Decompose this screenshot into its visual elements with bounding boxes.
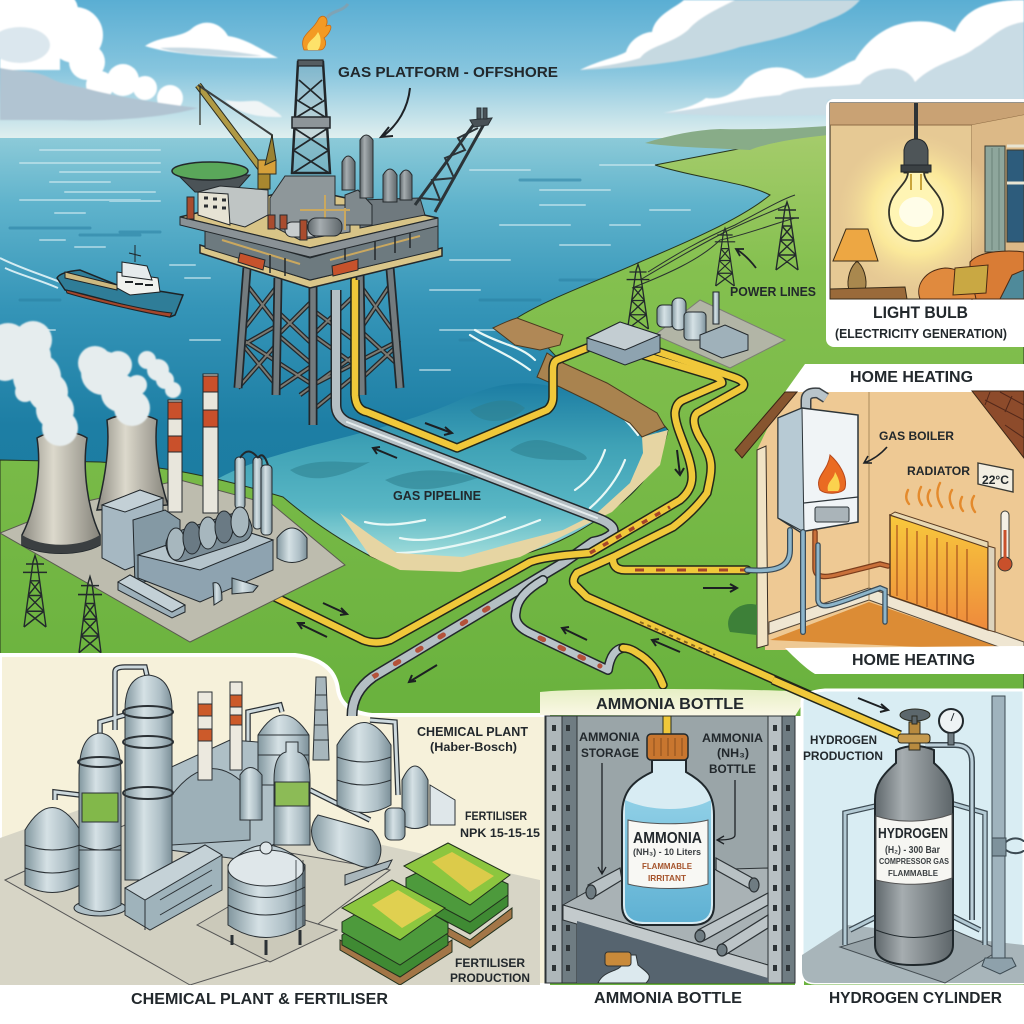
small cylinder behind bbox=[240, 768, 262, 820]
flare flame bbox=[303, 16, 331, 50]
bush bbox=[728, 604, 757, 635]
pipeline: yellow gas lines bbox=[240, 280, 900, 735]
panel: hydrogen cylinder: COMPRESSOR GAS bbox=[879, 857, 950, 866]
arrow: storage bbox=[598, 763, 606, 874]
front storage tank bbox=[232, 930, 300, 955]
pressure gauge bbox=[939, 709, 963, 745]
flare boom bbox=[415, 108, 492, 212]
cloud: small bbox=[145, 23, 278, 58]
bottom white strip bbox=[0, 985, 1024, 1024]
cloud: behind crane bbox=[225, 100, 282, 117]
sofa bbox=[919, 251, 1024, 299]
heat waves bbox=[906, 483, 975, 512]
label: radiator: RADIATOR bbox=[907, 464, 970, 478]
horizontal tank bbox=[312, 815, 381, 867]
onshore gas processing plant bbox=[587, 292, 785, 368]
cloud: left white puffs bbox=[0, 0, 183, 111]
pipe into bottle bbox=[663, 716, 671, 736]
helipad bbox=[178, 175, 250, 192]
thermostat: 22°C bbox=[982, 475, 1009, 487]
crane bbox=[198, 85, 276, 189]
bay: surf lines bbox=[365, 330, 638, 553]
small bottle below bbox=[598, 955, 649, 983]
panel: hydrogen cylinder: FLAMMABLE bbox=[888, 869, 939, 878]
thermostat bbox=[978, 463, 1013, 492]
label: ammonia nh3 bottle: AMMONIA bbox=[702, 731, 763, 745]
cylinder bbox=[875, 746, 953, 965]
arrow: bottle bbox=[717, 780, 735, 844]
yellow inlet over panel bbox=[773, 680, 900, 735]
pipeline: gas pipeline (grey) bbox=[336, 297, 613, 716]
stacks bbox=[198, 677, 329, 780]
coastal cliffs bbox=[493, 318, 563, 350]
wall bbox=[802, 690, 1024, 983]
beach sand along bay bbox=[340, 430, 668, 572]
label: gas platform: GAS PLATFORM - OFFSHORE bbox=[338, 64, 558, 81]
label: power lines: POWER LINES bbox=[730, 284, 816, 299]
glass bottle: AMMONIA bbox=[633, 830, 702, 847]
pipe into plant bbox=[352, 677, 373, 716]
panel: chemical plant and fertiliser bbox=[0, 655, 548, 985]
cooling tower front bbox=[22, 432, 100, 553]
roof right bbox=[972, 391, 1024, 458]
bay: seabed patches bbox=[290, 400, 587, 489]
column A bbox=[79, 733, 121, 912]
vessel small right bbox=[402, 766, 428, 828]
label: fertiliser production: FERTILISER bbox=[455, 956, 525, 970]
arrow: to power lines bbox=[736, 249, 756, 268]
heading: light bulb: LIGHT BULB bbox=[873, 303, 968, 322]
caption: hydrogen cylinder: HYDROGEN CYLINDER bbox=[829, 990, 1002, 1007]
shelf pipes bbox=[586, 858, 768, 956]
power station (left) bbox=[0, 321, 307, 618]
cloud: upper right bbox=[580, 0, 860, 70]
background: sky bbox=[0, 0, 1024, 140]
icon: flame bbox=[819, 455, 846, 493]
main reactor body bbox=[165, 740, 300, 860]
label: ammonia storage: AMMONIA bbox=[579, 730, 640, 744]
thermometer bbox=[998, 511, 1012, 571]
icon: pylons near power station bbox=[23, 556, 102, 653]
low process unit bbox=[125, 845, 222, 930]
banner bbox=[540, 689, 810, 716]
caption: chemical plant and fertiliser: CHEMICAL PLANT & FERTILISER bbox=[131, 991, 388, 1008]
icon: hanging bulb bbox=[889, 103, 943, 241]
panel: hydrogen cylinder bbox=[773, 680, 1024, 983]
arrow: inlet bbox=[858, 698, 888, 712]
heating pipes bbox=[747, 530, 888, 632]
caption: ammonia bottle: AMMONIA BOTTLE bbox=[594, 990, 742, 1007]
label: fertiliser npk: FERTILISER bbox=[465, 809, 527, 823]
valve bbox=[898, 709, 930, 750]
cliff band bbox=[537, 353, 665, 437]
floor bbox=[770, 602, 1024, 655]
panel: home heating bbox=[728, 364, 1024, 674]
cloud: right large bbox=[663, 0, 1024, 116]
risers in front of jacket bbox=[336, 280, 355, 405]
derrick bbox=[292, 60, 330, 173]
label: gas boiler: GAS BOILER bbox=[879, 429, 954, 443]
rack holes bbox=[554, 725, 788, 980]
cloud: left shadow layer bbox=[0, 68, 198, 120]
lower deck bbox=[200, 245, 442, 288]
power lines and pylons bbox=[627, 195, 816, 329]
rack uprights bbox=[546, 716, 795, 983]
house interior bbox=[757, 392, 1024, 650]
vessels bbox=[25, 675, 455, 955]
column B bbox=[125, 675, 172, 880]
gauge tube bbox=[925, 745, 972, 920]
power plant pad bbox=[0, 480, 345, 642]
caption: electricity generation: (ELECTRICITY GENERATION) bbox=[835, 326, 1007, 341]
grey-green vessel bbox=[274, 742, 310, 845]
clouds bbox=[0, 0, 1024, 120]
arrow: to boiler bbox=[864, 447, 887, 463]
plant pad bbox=[5, 825, 390, 985]
whitecaps on the sea bbox=[20, 150, 690, 370]
label: storage: STORAGE bbox=[581, 746, 639, 760]
gutter between ammonia and hydrogen panels bbox=[795, 716, 804, 986]
jacket bracing bbox=[238, 285, 400, 410]
label: gas pipeline: GAS PIPELINE bbox=[393, 489, 481, 503]
table lamp bbox=[833, 229, 878, 292]
panel: ammonia bottle bbox=[540, 689, 810, 983]
accommodation block bbox=[198, 186, 268, 227]
glass bottle: FLAMMABLE bbox=[642, 861, 692, 871]
radiator bbox=[890, 512, 995, 632]
steam plumes bbox=[0, 321, 181, 446]
tank left bbox=[25, 808, 80, 892]
label: chemical plant: CHEMICAL PLANT bbox=[417, 725, 528, 739]
ground bbox=[0, 790, 540, 985]
panel: hydrogen cylinder: HYDROGEN bbox=[878, 825, 948, 842]
label: bottle: BOTTLE bbox=[709, 762, 756, 776]
stacks bbox=[168, 374, 218, 513]
shelf bbox=[563, 868, 768, 965]
frame bbox=[845, 803, 985, 945]
gas boiler bbox=[778, 408, 858, 532]
vessel back bbox=[258, 715, 309, 785]
arrow: to platform bbox=[381, 88, 410, 137]
heading: home heating top: HOME HEATING bbox=[850, 369, 973, 386]
cream background bbox=[0, 655, 548, 985]
fertiliser pallet back bbox=[404, 843, 512, 948]
cooling tower back bbox=[97, 415, 168, 510]
label: npk: NPK 15-15-15 bbox=[460, 826, 540, 840]
connecting pipes bbox=[55, 667, 398, 820]
fertiliser pallet front bbox=[340, 880, 452, 985]
banner bottom bbox=[785, 646, 1024, 674]
banner top bbox=[785, 364, 1024, 392]
jacket legs bbox=[238, 268, 400, 425]
window and curtain bbox=[985, 146, 1024, 252]
pole bbox=[982, 696, 1024, 974]
label: haber-bosch: (Haber-Bosch) bbox=[430, 740, 517, 754]
floor bbox=[802, 925, 1024, 983]
cylinder label bbox=[876, 814, 952, 884]
flow arrows on pipelines bbox=[298, 423, 737, 682]
gas platform bbox=[172, 4, 558, 425]
bottle label bbox=[628, 820, 708, 888]
upper deck bbox=[180, 188, 438, 248]
room wall bbox=[830, 103, 1024, 299]
heading: home heating bottom: HOME HEATING bbox=[852, 652, 975, 669]
heading: ammonia bottle: AMMONIA BOTTLE bbox=[596, 696, 744, 713]
label: production: PRODUCTION bbox=[803, 749, 883, 763]
panel: light bulb bbox=[826, 99, 1024, 347]
label: nh3: (NH₃) bbox=[717, 746, 749, 760]
process block and vessels bbox=[187, 135, 425, 240]
flue bbox=[806, 393, 826, 410]
label: production: PRODUCTION bbox=[450, 971, 530, 985]
bay: shallow water bbox=[200, 383, 670, 590]
cloud: left inner shade bbox=[0, 27, 50, 63]
glass bottle bbox=[622, 734, 714, 925]
pipeline: branch to ammonia bbox=[516, 580, 623, 670]
wall and roof edge left bbox=[757, 446, 768, 648]
process buildings bbox=[102, 452, 307, 618]
shelving background bbox=[545, 716, 795, 983]
glass bottle: (NH₃) - 10 Liters bbox=[633, 847, 701, 858]
ship bbox=[0, 245, 183, 317]
glass bottle: IRRITANT bbox=[648, 873, 687, 883]
background: ocean bbox=[0, 138, 1024, 588]
distant headland bbox=[645, 126, 828, 150]
panel: hydrogen cylinder: (H₂) - 300 Bar bbox=[885, 845, 940, 856]
vessel big right bbox=[337, 722, 391, 812]
label: hydrogen: HYDROGEN bbox=[810, 733, 877, 747]
side table bbox=[830, 287, 907, 299]
glow bbox=[838, 134, 994, 290]
